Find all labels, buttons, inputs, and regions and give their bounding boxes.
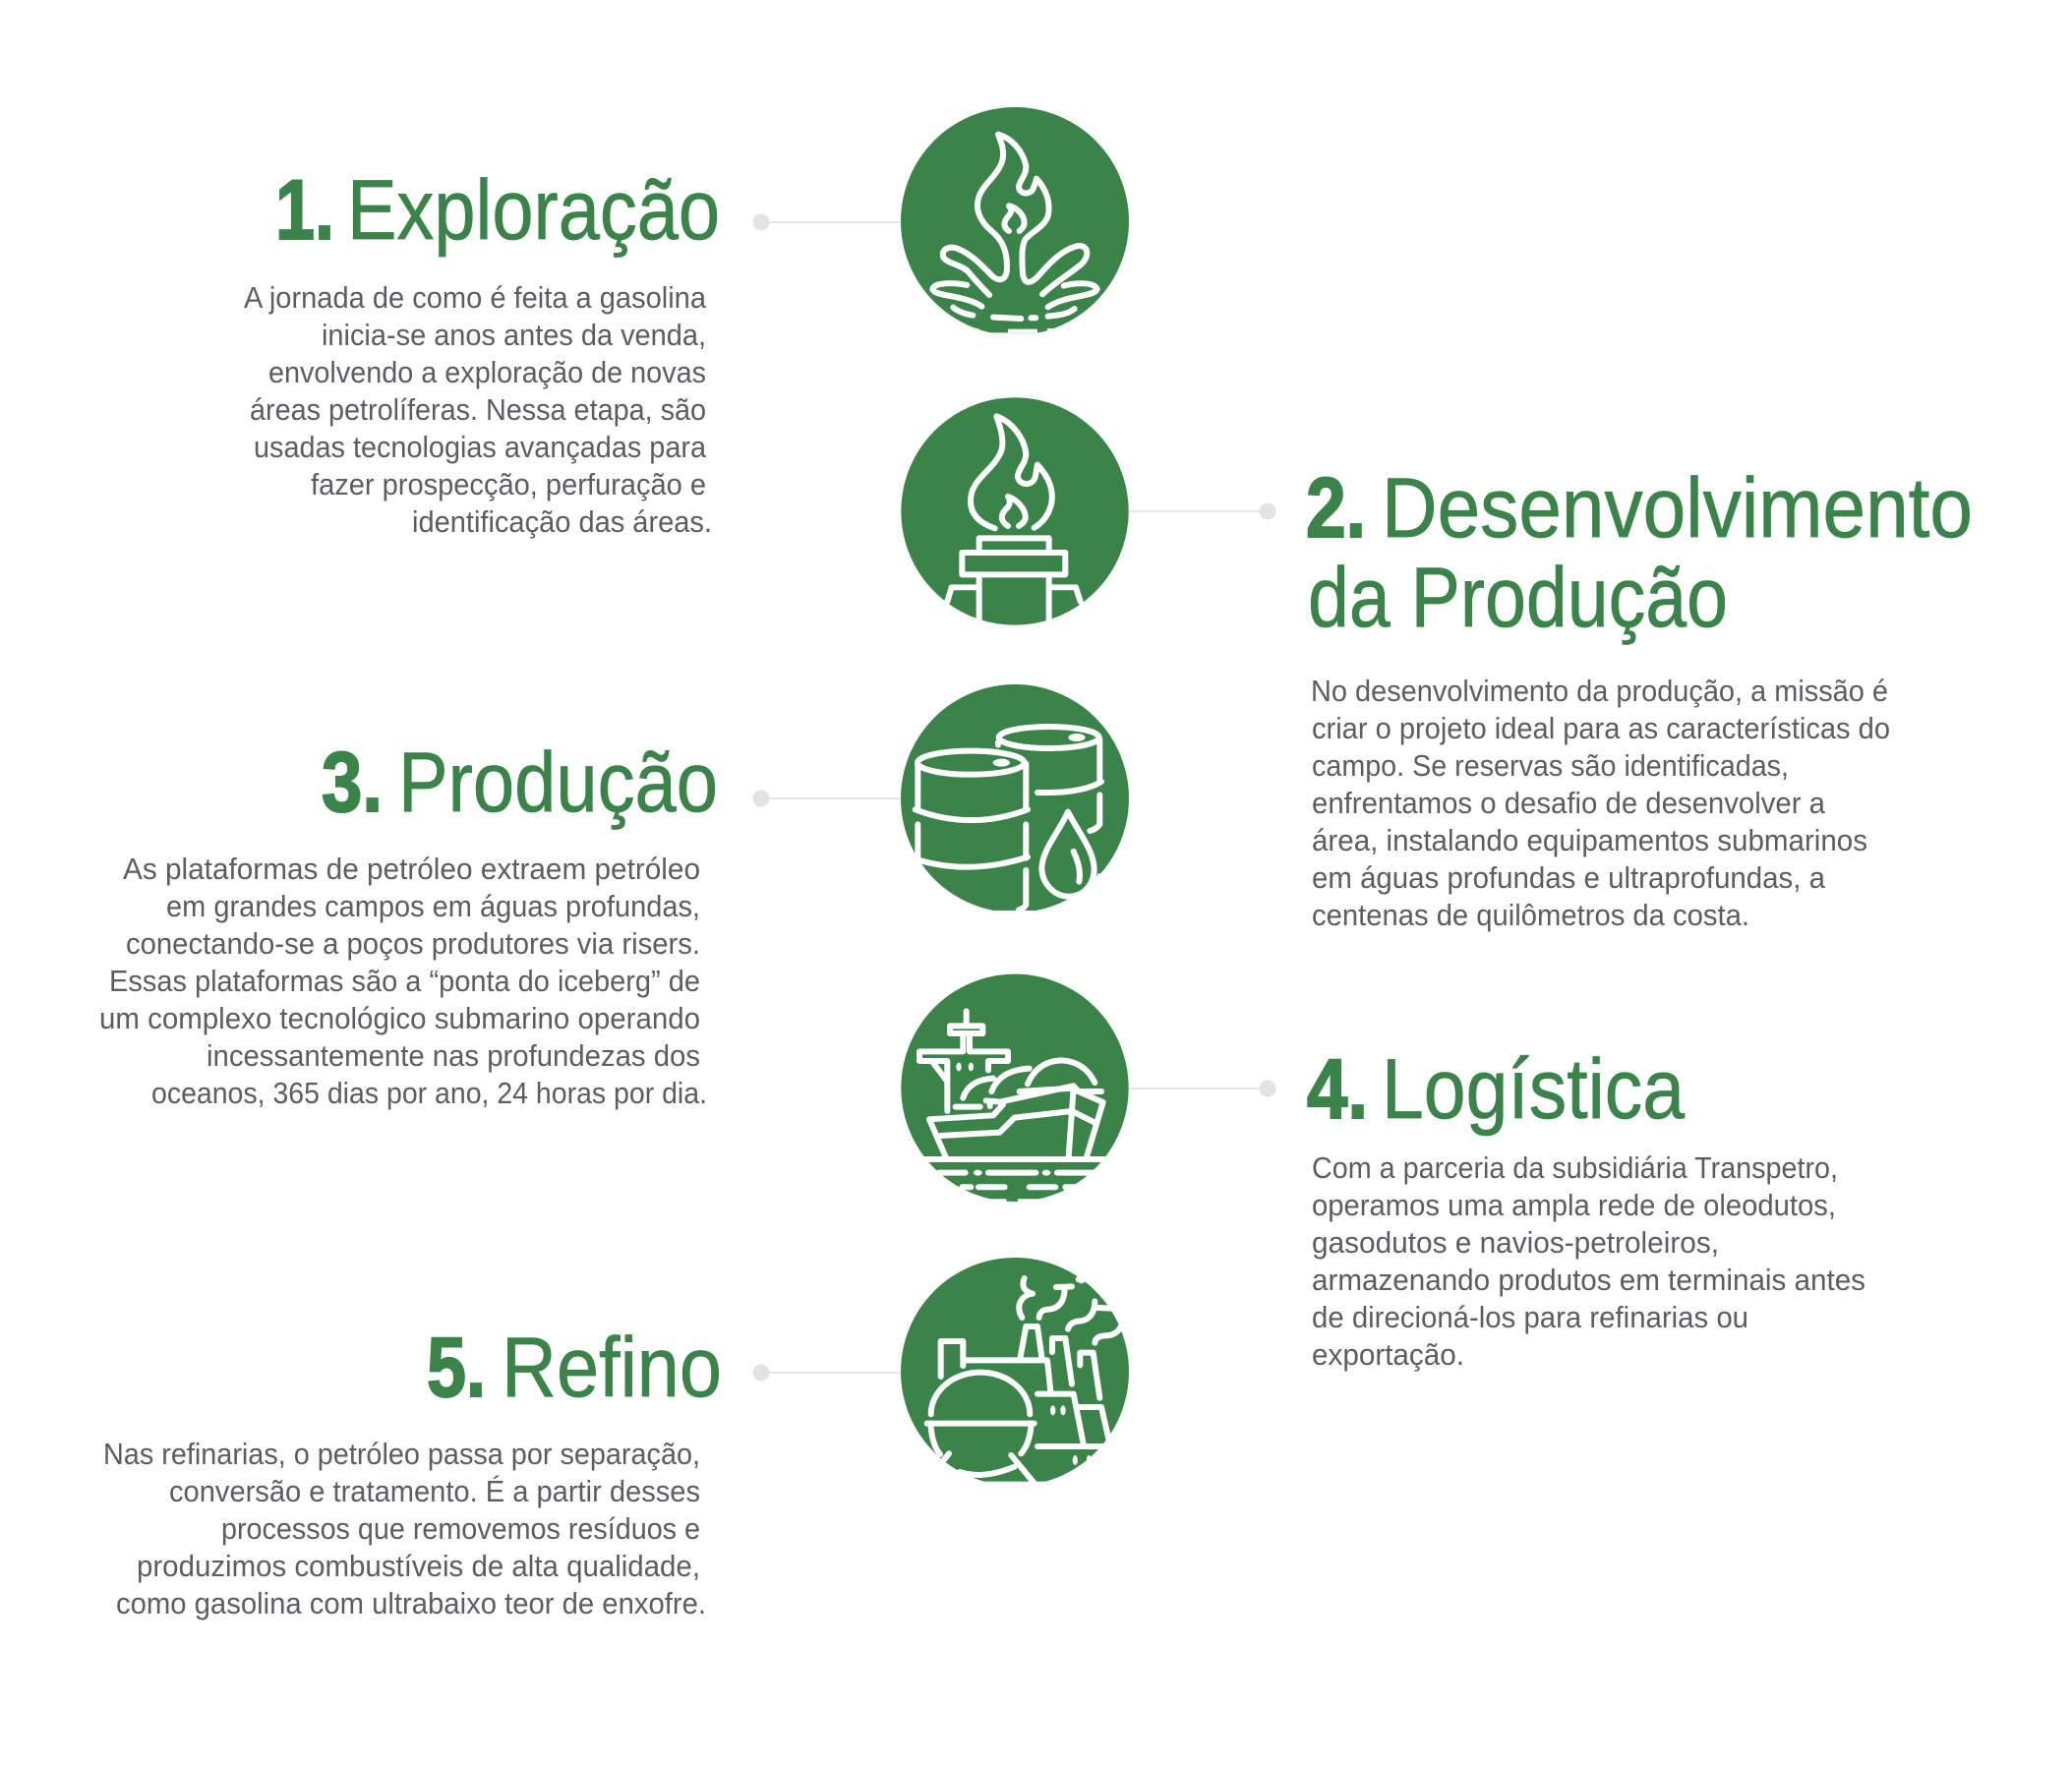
- text block: step 1: identificação das áreas.: [412, 504, 712, 539]
- text block: step 2: criar o projeto ideal para as características do: [1312, 711, 1890, 745]
- text block: step 5: como gasolina com ultrabaixo teor de enxofre.: [116, 1586, 706, 1620]
- text block: step 3: oceanos, 365 dias por ano, 24 horas por dia.: [151, 1076, 707, 1110]
- text block: step 4: [1312, 1150, 1865, 1372]
- text block: step 4: armazenando produtos em terminais antes: [1312, 1263, 1865, 1297]
- panel: 2. Desenvolvimento da Produção: [1306, 461, 1973, 932]
- heading: 3. Produção: Produção: [398, 736, 718, 830]
- connector: step 2: [1125, 503, 1276, 519]
- panel: 1. Exploração: [244, 163, 720, 539]
- heading: 2. Desenvolvimento da Produção: Desenvolvimento: [1382, 461, 1973, 556]
- connector: step 1: [753, 214, 905, 230]
- text block: step 3: um complexo tecnológico submarino operando: [99, 1001, 700, 1035]
- text block: step 2: centenas de quilômetros da costa.: [1312, 898, 1749, 932]
- heading: 2. Desenvolvimento da Produção: 2.: [1306, 461, 1366, 556]
- text block: step 4: Com a parceria da subsidiária Transpetro,: [1312, 1150, 1838, 1185]
- text block: step 5: [103, 1437, 706, 1620]
- icon: tanker ship: [898, 974, 1134, 1208]
- text block: step 1: fazer prospecção, perfuração e: [311, 467, 706, 501]
- connector: step 5: [753, 1365, 905, 1381]
- text block: step 2: No desenvolvimento da produção, a missão é: [1311, 674, 1888, 708]
- text block: step 5: Nas refinarias, o petróleo passa por separação,: [103, 1437, 700, 1471]
- text block: step 3: em grandes campos em águas profundas,: [166, 889, 700, 923]
- text block: step 1: envolvendo a exploração de novas: [268, 355, 706, 389]
- text block: step 1: inicia-se anos antes da venda,: [322, 318, 706, 352]
- heading: 1. Exploração: 1.: [275, 163, 334, 258]
- text block: step 2: área, instalando equipamentos submarinos: [1312, 823, 1867, 857]
- text block: step 5: processos que removemos resíduos e: [221, 1511, 700, 1546]
- text block: step 1: [244, 280, 712, 539]
- icon: flare stack: [901, 397, 1129, 625]
- heading: 5. Refino: [427, 1321, 722, 1415]
- connector: step 4: [1125, 1080, 1276, 1097]
- text block: step 3: conectando-se a poços produtores via risers.: [126, 926, 700, 961]
- heading: 5. Refino: 5.: [427, 1321, 486, 1415]
- text block: step 2: em águas profundas e ultraprofundas, a: [1312, 860, 1826, 895]
- icon: oil barrels and drop: [898, 684, 1141, 920]
- heading: 3. Produção: 3.: [322, 736, 383, 830]
- text block: step 3: As plataformas de petróleo extraem petróleo: [123, 852, 700, 886]
- text block: step 5: produzimos combustíveis de alta qualidade,: [137, 1549, 700, 1583]
- heading: 5. Refino: Refino: [502, 1321, 722, 1415]
- heading: 2. Desenvolvimento da Produção: [1306, 461, 1973, 645]
- text block: step 1: usadas tecnologias avançadas para: [254, 430, 707, 464]
- heading: 4. Logística: 4.: [1307, 1042, 1368, 1137]
- text block: step 3: [99, 852, 707, 1110]
- text block: step 4: gasodutos e navios-petroleiros,: [1312, 1225, 1719, 1260]
- text block: step 2: [1311, 674, 1890, 932]
- panel: 4. Logística: [1307, 1042, 1865, 1372]
- text block: step 1: A jornada de como é feita a gasolina: [244, 280, 707, 315]
- text block: step 3: incessantemente nas profundezas dos: [207, 1038, 700, 1073]
- heading: 4. Logística: Logística: [1382, 1042, 1685, 1137]
- panel: 3. Produção: [99, 736, 718, 1110]
- text block: step 1: áreas petrolíferas. Nessa etapa, são: [250, 392, 706, 427]
- heading: 2. Desenvolvimento da Produção: da Produção: [1308, 551, 1728, 645]
- panel: 5. Refino: [103, 1321, 722, 1620]
- text block: step 4: operamos uma ampla rede de oleodutos,: [1312, 1188, 1836, 1222]
- text block: step 2: enfrentamos o desafio de desenvolver a: [1312, 786, 1826, 820]
- icon: refinery: [898, 1258, 1134, 1495]
- connector: step 3: [753, 791, 905, 806]
- heading: 1. Exploração: Exploração: [347, 163, 720, 258]
- text block: step 4: de direcioná-los para refinarias ou: [1312, 1300, 1748, 1334]
- text block: step 3: Essas plataformas são a “ponta do iceberg” de: [109, 964, 700, 998]
- text block: step 5: conversão e tratamento. É a partir desses: [169, 1474, 700, 1508]
- text block: step 4: exportação.: [1312, 1337, 1464, 1372]
- icon: flare on wellhead: [898, 107, 1134, 342]
- text block: step 2: campo. Se reservas são identificadas,: [1312, 748, 1789, 783]
